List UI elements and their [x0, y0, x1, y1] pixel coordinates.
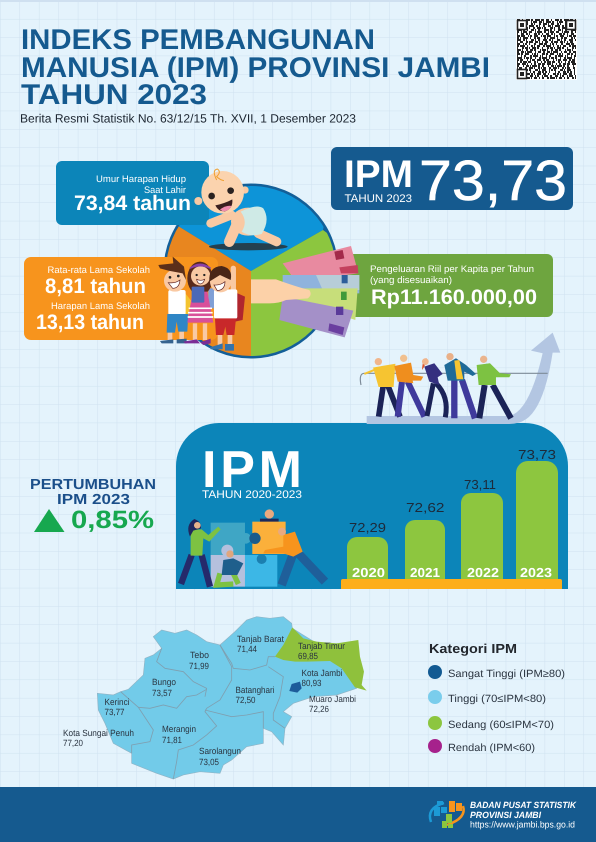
bar 2022: [461, 477, 503, 582]
panel: schooling: [24, 257, 218, 340]
map of Jambi province: 73,57: [152, 688, 172, 698]
map of Jambi province: Tanjab Barat: [237, 634, 284, 644]
map of Jambi province: 71,99: [189, 661, 209, 671]
icon: BPS logo: [430, 801, 464, 828]
map of Jambi province: 73,05: [199, 757, 219, 767]
panel: life expectancy: 73,84 tahun: [74, 192, 191, 215]
bar 2023: 2023: [520, 565, 552, 580]
footer: PROVINSI JAMBI: [470, 810, 541, 820]
map of Jambi province: [63, 617, 367, 779]
panel: IPM headline: IPM: [344, 153, 413, 196]
map of Jambi province: 73,77: [104, 707, 124, 717]
chart heading: TAHUN 2020-2023: [202, 489, 302, 501]
icon: hand holding rupiah banknotes: [251, 246, 359, 337]
footer: BADAN PUSAT STATISTIK: [470, 800, 577, 810]
map of Jambi province: Batanghari: [236, 685, 274, 695]
map of Jambi province: 77,20: [63, 738, 83, 748]
map of Jambi province: Kerinci: [104, 697, 130, 707]
chart heading: IPM: [202, 441, 302, 499]
map of Jambi province: Tebo: [190, 650, 209, 660]
legend: Tinggi (70≤IPM<80): [448, 693, 546, 705]
icon: crawling baby: [194, 169, 288, 250]
panel: schooling: Harapan Lama Sekolah: [51, 301, 150, 312]
legend: Sedang (60≤IPM<70): [448, 719, 554, 731]
pie chart: [164, 184, 336, 358]
illustration: team assembling puzzle: [181, 509, 325, 587]
footer: [0, 787, 596, 842]
map of Jambi province: 80,93: [302, 678, 322, 688]
panel: IPM headline: [331, 147, 573, 213]
bar 2022: 73,11: [464, 477, 496, 492]
bar 2021: [405, 500, 445, 582]
legend: Kategori IPM: [429, 641, 517, 656]
map of Jambi province: Tanjab Timur: [298, 641, 345, 651]
panel: growth: 0,85%: [71, 506, 154, 534]
title: INDEKS PEMBANGUNAN: [21, 24, 375, 56]
bar 2020: 2020: [352, 565, 385, 580]
panel: growth: IPM 2023: [57, 492, 130, 508]
panel: schooling: 8,81 tahun: [45, 275, 146, 298]
region: Tanjab Timur: [275, 627, 367, 691]
map of Jambi province: Bungo: [152, 677, 176, 687]
panel: life expectancy: Umur Harapan Hidup: [96, 174, 186, 185]
map of Jambi province: 71,44: [237, 644, 257, 654]
map of Jambi province: 69,85: [298, 651, 318, 661]
legend: [428, 641, 565, 754]
panel: IPM chart background: [176, 423, 568, 589]
map of Jambi province: Merangin: [162, 724, 196, 734]
subtitle: Berita Resmi Statistik No. 63/12/15 Th. XVII, 1 Desember 2023: [20, 112, 356, 126]
bar 2020: [347, 520, 388, 582]
map of Jambi province: Kota Sungai Penuh: [63, 728, 134, 738]
panel: life expectancy: Saat Lahir: [144, 185, 186, 196]
bar 2023: [516, 447, 558, 582]
icon: up triangle: [34, 509, 64, 532]
panel: growth: PERTUMBUHAN: [30, 477, 156, 493]
legend: Rendah (IPM<60): [448, 742, 535, 754]
region: Kota Jambi: [289, 682, 302, 693]
panel: IPM headline: 73,73: [419, 149, 567, 213]
title: TAHUN 2023: [21, 79, 207, 111]
title: [21, 24, 490, 111]
map of Jambi province: 72,50: [236, 695, 256, 705]
panel: schooling: Rata-rata Lama Sekolah: [48, 265, 150, 276]
illustration: tug of war with rising arrow: [360, 333, 560, 424]
panel: expenditure: [345, 254, 553, 317]
panel: IPM headline: TAHUN 2023: [344, 193, 412, 205]
panel: expenditure: (yang disesuaikan): [370, 275, 452, 286]
bar 2021: 2021: [410, 565, 440, 580]
chart base: [341, 579, 562, 589]
panel: schooling: 13,13 tahun: [36, 311, 144, 334]
panel: expenditure: Pengeluaran Riil per Kapita per Tahun: [370, 264, 534, 275]
map of Jambi province: 72,26: [309, 704, 329, 714]
bar chart: [341, 447, 562, 589]
map of Jambi province: 71,81: [162, 735, 182, 745]
icon: three school children: [158, 257, 245, 351]
panel: life expectancy: [56, 161, 209, 225]
map of Jambi province: Sarolangun: [199, 746, 241, 756]
panel: growth: [30, 477, 156, 534]
bar 2021: 72,62: [406, 500, 444, 515]
icon: QR code: [516, 19, 577, 80]
legend: Sangat Tinggi (IPM≥80): [448, 668, 565, 680]
title: MANUSIA (IPM) PROVINSI JAMBI: [21, 52, 490, 84]
footer: https://www.jambi.bps.go.id: [470, 820, 575, 830]
panel: expenditure: Rp11.160.000,00: [371, 286, 537, 309]
bar 2022: 2022: [467, 565, 499, 580]
map of Jambi province: Kota Jambi: [302, 668, 342, 678]
bar 2020: 72,29: [349, 520, 386, 535]
map of Jambi province: Muaro Jambi: [309, 694, 356, 704]
bar 2023: 73,73: [518, 447, 556, 462]
